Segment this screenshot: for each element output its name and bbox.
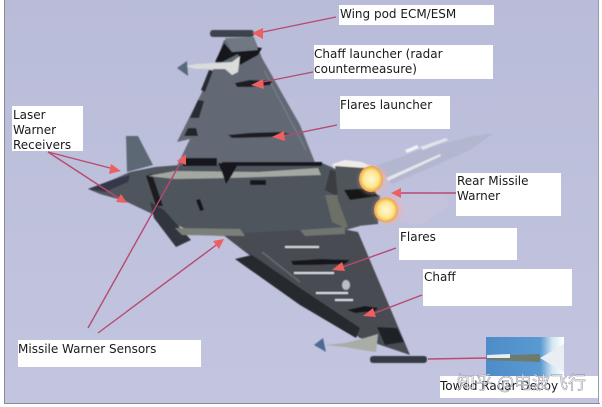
arrows: missile warner sensors <box>88 154 224 333</box>
arrows: laser warner receivers <box>48 152 127 203</box>
arrow: rear missile warner <box>391 188 456 198</box>
arrow: flares launcher <box>272 125 337 141</box>
lower wing <box>222 228 410 355</box>
label: chaff launcher: countermeasure) <box>314 62 417 76</box>
fin <box>126 136 153 172</box>
label: flares <box>399 228 517 260</box>
label: rear missile warner: Rear Missile <box>457 174 529 188</box>
wing pod ECM/ESM <box>210 30 254 37</box>
label: chaff <box>423 269 572 306</box>
engines <box>335 166 380 227</box>
lower wing pod <box>370 356 427 363</box>
fuselage missiles and dark panels <box>148 158 370 236</box>
label: missile warner sensors: Missile Warner Sensors <box>18 342 156 356</box>
label: laser warner receivers: Laser <box>13 108 46 122</box>
upper missile <box>177 56 240 76</box>
lower missile <box>314 334 378 352</box>
label: towed radar decoy: Towed Radar Decoy <box>439 379 558 393</box>
label: laser warner receivers: Warner <box>13 123 56 137</box>
watermark: 知乎 @电波飞行 <box>457 369 586 395</box>
label: wing pod ECM/ESM <box>339 5 494 25</box>
arrow: wing pod <box>252 17 336 39</box>
label: flares launcher: Flares launcher <box>340 98 432 112</box>
exhaust nozzles <box>359 166 402 224</box>
label: rear missile warner: Warner <box>457 189 500 203</box>
inset: towed radar decoy photo <box>486 337 564 377</box>
label: laser warner receivers: Receivers <box>13 138 71 152</box>
exhaust trails <box>332 133 494 225</box>
label: wing pod ECM/ESM: Wing pod ECM/ESM <box>340 7 456 21</box>
label: rear missile warner <box>456 173 561 216</box>
label: flares: Flares <box>400 230 436 244</box>
arrow: towed decoy <box>428 358 487 359</box>
aircraft <box>88 30 494 363</box>
arrow: chaff launcher <box>251 72 313 89</box>
label: laser warner receivers <box>12 106 83 152</box>
label: towed radar decoy <box>439 376 598 398</box>
label: missile warner sensors <box>18 340 201 367</box>
arrow: chaff <box>363 295 422 317</box>
label: chaff: Chaff <box>424 270 456 284</box>
label: chaff launcher: Chaff launcher (radar <box>314 47 443 61</box>
fuselage <box>88 163 360 236</box>
upper wing <box>177 37 322 166</box>
label: chaff launcher <box>314 45 493 79</box>
arrow: flares <box>332 248 396 271</box>
label: flares launcher <box>340 96 450 129</box>
canard <box>150 202 191 247</box>
